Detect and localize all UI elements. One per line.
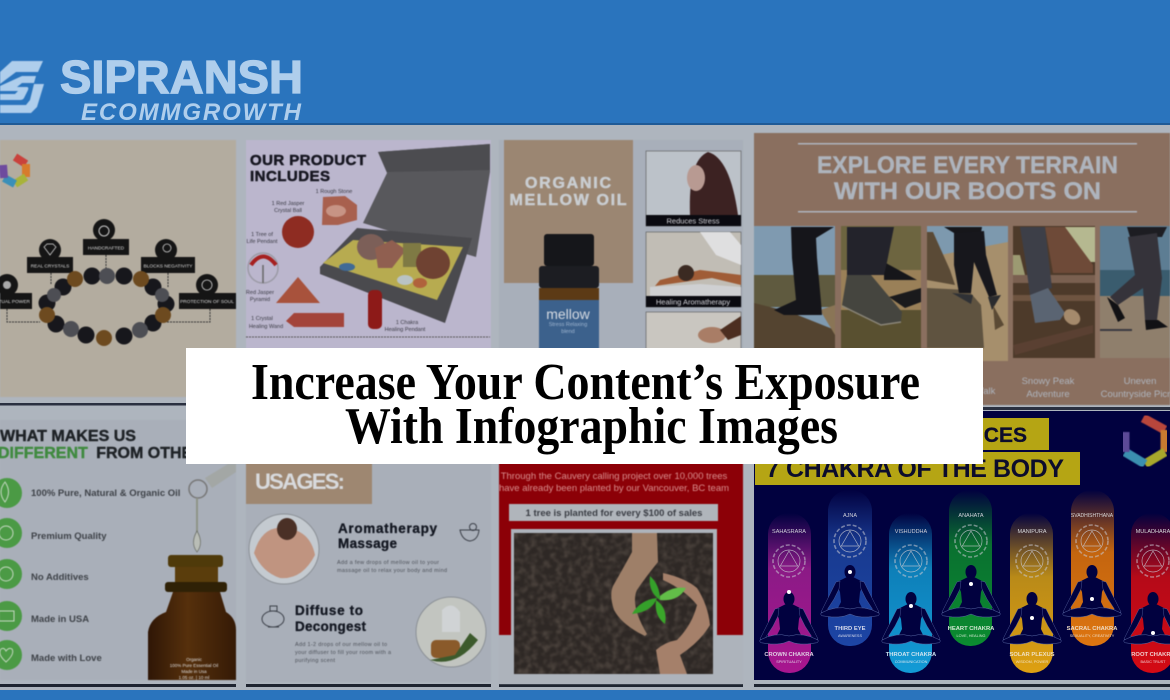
benefits list: No Additives — [31, 572, 89, 583]
heading line two: WITH OUR BOOTS ON — [834, 178, 1101, 205]
label: real crystals — [27, 239, 73, 273]
chakra: sacral: SEXUALITY, CREATIVITY — [1070, 634, 1115, 638]
red banner — [499, 440, 743, 635]
callout: one tree per $100 — [509, 504, 718, 521]
photo 3: hiker on sand — [927, 226, 1008, 361]
benefits list: Made with Love — [31, 653, 102, 664]
title line two: With Infographic Images — [345, 398, 838, 455]
callout: one tree per $100: 1 tree is planted for every $100 of sales — [526, 508, 702, 519]
logo tagline: ECOMMGROWTH — [81, 99, 302, 126]
panel: explore every terrain — [754, 133, 1170, 405]
text: aromatherapy massage: Add a few drops of mellow oil to your — [337, 560, 439, 566]
banner text — [499, 471, 729, 494]
logo: Sipransh Ecommgrowth — [0, 51, 303, 126]
logo mark — [0, 61, 44, 113]
photo card: reduces stress: Reduces Stress — [667, 216, 720, 226]
photo 4: boot on log — [1013, 226, 1095, 358]
yellow heading banners — [755, 418, 1080, 485]
soil photo — [514, 533, 713, 674]
separator bars — [0, 403, 1170, 687]
chakra: root: MULADHARA — [1136, 529, 1170, 535]
label: protection of soul — [179, 274, 236, 309]
photo 5: hiker by sea — [1100, 226, 1170, 358]
label: spiritual power — [0, 274, 32, 309]
icon: diffuser — [262, 606, 284, 627]
chakra: third eye: AWARENESS — [838, 634, 862, 638]
benefits list: 100% Pure, Natural & Organic Oil — [31, 488, 180, 499]
tan heading block — [504, 140, 633, 283]
terrain captions — [975, 376, 1170, 400]
yellow heading banners: 7 CHAKRA OF THE BODY — [766, 455, 1064, 483]
chakra: heart: ANAHATA — [958, 513, 984, 519]
header divider — [0, 123, 1170, 125]
heading line two: MELLOW OIL — [510, 192, 627, 209]
photo card: healing aromatherapy — [646, 232, 741, 307]
banner text: have already been planted by our Vancouver, BC team — [499, 483, 729, 494]
photo 1: hiker on rocks — [754, 226, 835, 361]
amber oil bottle: 100% Pure Essential Oil — [170, 663, 218, 668]
chakra: crown: CROWN CHAKRA — [764, 652, 814, 658]
item captions: Life Pendant — [247, 239, 278, 245]
item captions: Pyramid — [250, 297, 270, 303]
chakra: throat: VISHUDDHA — [895, 529, 928, 535]
item captions: Healing Wand — [249, 324, 283, 330]
terrain captions: Snowy Peak — [1022, 376, 1075, 387]
item captions — [246, 189, 426, 333]
chakra: solar plexus: WISDOM, POWER — [1016, 660, 1048, 664]
mellow bottle: mellow — [546, 306, 591, 322]
label: handcrafted: HANDCRAFTED — [88, 246, 125, 252]
amber oil bottle: 1.05 oz. | 10 ml — [179, 675, 209, 680]
dashed connector lines — [7, 255, 210, 322]
photo: diffuser — [416, 597, 486, 667]
chakra: crown: SPIRITUALITY — [776, 660, 802, 664]
heading: ORGANIC — [525, 175, 611, 192]
mellow bottle — [539, 234, 599, 350]
chakra: throat — [882, 513, 940, 673]
text: aromatherapy massage: massage oil to relax your body and mind — [337, 568, 447, 574]
yellow heading banners: PRACTICES — [906, 424, 1027, 447]
chakra: solar plexus: MANIPURA — [1017, 529, 1047, 535]
bead bracelet — [38, 268, 174, 346]
item captions: Healing Pendant — [385, 327, 426, 333]
terrain captions: Walk — [975, 386, 996, 397]
title card — [186, 348, 983, 464]
banner text: Through the Cauvery calling project over 10,000 trees — [501, 471, 728, 482]
heading line two: INCLUDES — [250, 168, 330, 185]
chakra: sacral: SACRAL CHAKRA — [1067, 626, 1118, 632]
chakra: heart — [942, 490, 1000, 646]
hands holding seedling — [611, 533, 710, 674]
chakra: heart: LOVE, HEALING — [957, 634, 985, 638]
chakra: crown: SAHASRARA — [772, 529, 806, 535]
text: diffuse to decongest: purifying scent — [295, 658, 335, 664]
icon: colour hexagon logo — [3, 157, 26, 184]
text: diffuse to decongest: your diffuser to fill your room with a — [295, 650, 392, 656]
panel: organic mellow oil — [499, 140, 743, 397]
chakra: solar plexus: SOLAR PLEXUS — [1009, 652, 1055, 658]
chakra: solar plexus — [1003, 513, 1061, 673]
item captions: 1 Crystal — [251, 316, 273, 322]
panel: seven chakras — [754, 411, 1170, 680]
chakra: throat: COMMUNICATION — [895, 660, 928, 664]
chakra: third eye — [821, 490, 879, 646]
panel: tree planting — [499, 406, 743, 684]
text: diffuse to decongest: Diffuse to — [295, 603, 363, 618]
photo card: sleep — [646, 312, 741, 362]
panel: multiple usages — [246, 406, 491, 682]
chakra: sacral: SVADHISHTHANA — [1071, 513, 1114, 519]
photo 2: boot close-up — [841, 226, 921, 361]
text: diffuse to decongest: Decongest — [295, 619, 366, 634]
benefits list — [0, 478, 180, 670]
dropper and oil drop — [189, 464, 236, 552]
heading line two: DIFFERENT FROM OTHERS — [0, 445, 215, 462]
title line one: Increase Your Content’s Exposure — [251, 354, 920, 411]
item captions: 1 Tree of — [251, 232, 273, 238]
tan heading block — [246, 406, 372, 504]
heading: EXPLORE EVERY TERRAIN — [817, 152, 1118, 179]
mellow bottle: Stress Relaxing — [549, 322, 587, 328]
item captions: 1 Red Jasper — [272, 201, 305, 207]
item captions: 1 Chakra — [396, 320, 419, 326]
icon: aromatherapy bowl — [460, 524, 479, 541]
heading: WHAT MAKES US — [0, 428, 136, 445]
amber oil bottle — [148, 555, 236, 680]
photo card: healing aromatherapy: Healing Aromatherapy — [656, 298, 730, 306]
crystals and stones — [248, 196, 382, 329]
amber oil bottle: Organic — [186, 657, 203, 662]
text: aromatherapy massage: Massage — [338, 536, 397, 551]
chakra: root — [1124, 513, 1170, 673]
benefits list: Premium Quality — [31, 531, 107, 542]
benefits list: Made in USA — [31, 614, 89, 625]
chakra: third eye: AJNA — [843, 513, 857, 519]
chakra: heart: HEART CHAKRA — [948, 626, 995, 632]
terrain captions: Adventure — [1026, 389, 1070, 400]
label: blocks negativity: BLOCKS NEGATIVITY — [144, 264, 193, 270]
photo frame — [511, 529, 717, 680]
logo wordmark: SIPRANSH — [60, 51, 303, 103]
label: real crystals: REAL CRYSTALS — [31, 264, 69, 270]
chakra: throat: THROAT CHAKRA — [886, 652, 937, 658]
chakra: crown — [760, 513, 818, 673]
gift box — [320, 144, 490, 323]
item captions: 1 Rough Stone — [316, 189, 352, 195]
photo card: reduces stress — [646, 151, 741, 226]
heading: USAGES: — [255, 469, 345, 494]
text: aromatherapy massage: Aromatherapy — [338, 521, 437, 536]
item captions: Crystal Ball — [274, 208, 302, 214]
panel: bracelet benefits — [0, 140, 236, 397]
panel: our product includes — [246, 140, 491, 397]
heading rule bottom — [798, 211, 1137, 212]
text: diffuse to decongest — [295, 603, 392, 664]
terrain captions: Uneven — [1124, 376, 1156, 387]
text: aromatherapy massage — [337, 521, 447, 574]
label: blocks negativity — [141, 239, 195, 273]
chakra: third eye: THIRD EYE — [835, 626, 866, 632]
text: diffuse to decongest: Add 1-2 drops of our mellow oil to — [295, 642, 387, 648]
label: protection of soul: PROTECTION OF SOUL — [180, 299, 234, 305]
heading rule top — [798, 143, 1137, 144]
chakra: sacral — [1063, 490, 1121, 646]
mellow bottle: blend — [561, 329, 575, 335]
panel: what makes us different — [0, 420, 236, 680]
item captions: Red Jasper — [246, 290, 274, 296]
chakra: root: BASIC TRUST — [1140, 660, 1166, 664]
amber oil bottle: Made in Usa — [181, 669, 207, 674]
label: handcrafted — [83, 219, 129, 255]
heading: OUR PRODUCT — [250, 152, 366, 169]
icon: colour hexagon logo — [1125, 418, 1165, 464]
photo: massage — [249, 514, 319, 584]
